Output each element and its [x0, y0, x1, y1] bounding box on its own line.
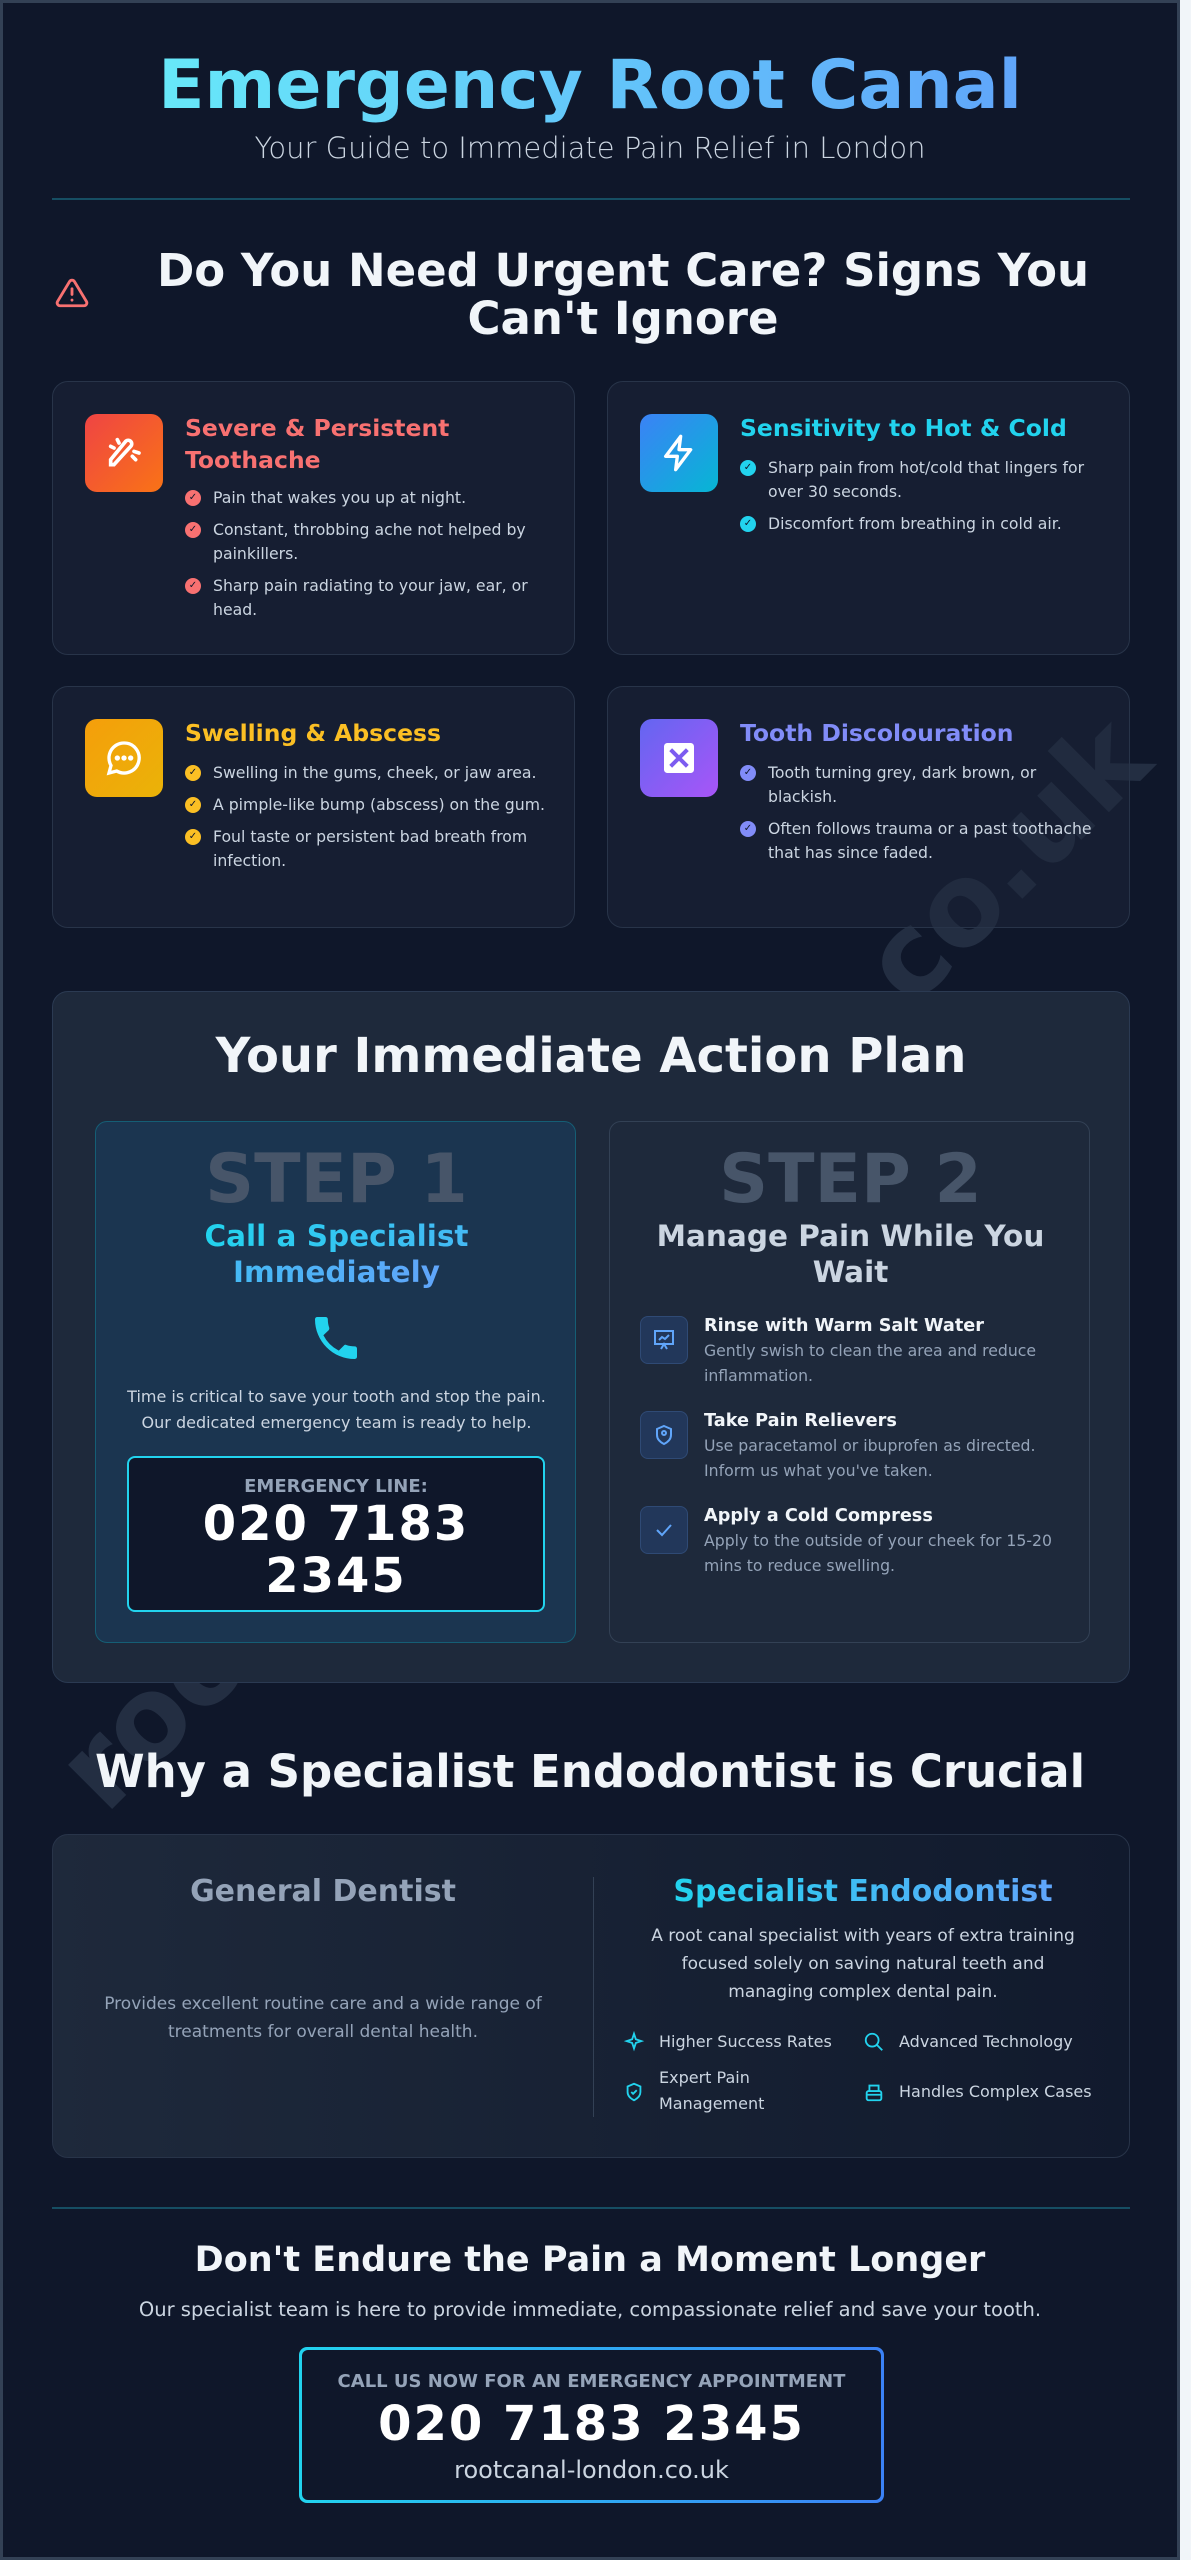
item: rinse [640, 1316, 1036, 1385]
item: rinse: Gently swish to clean the area and reduce inflammation. [704, 1341, 1036, 1385]
card title: Sensitivity to Hot & Cold [740, 414, 1067, 442]
card title: Swelling & Abscess [185, 719, 441, 747]
card title: Severe & Persistent Toothache [185, 414, 449, 474]
column: specialist: focused solely on saving natural teeth and [682, 1954, 1044, 1974]
card: swelling [52, 686, 575, 928]
panel: action plan [52, 991, 1130, 1683]
icon: phone [315, 1317, 357, 1359]
item: rinse: Rinse with Warm Salt Water [704, 1316, 984, 1336]
bullets: ✓ [189, 831, 197, 842]
title: Emergency Root Canal [158, 46, 1022, 125]
step 2 [609, 1121, 1090, 1643]
bullets: ✓ [189, 767, 197, 778]
column: general dentist [104, 1874, 542, 2042]
card: discolouration [607, 686, 1130, 928]
bullets: ✓ [189, 524, 197, 535]
column: general dentist: Provides excellent routine care and a wide range of [104, 1994, 542, 2014]
item: relievers: Take Pain Relievers [704, 1411, 897, 1431]
heading: action plan: Your Immediate Action Plan [216, 1028, 966, 1084]
step 1 title: Immediately [233, 1255, 440, 1289]
column: general dentist: General Dentist [190, 1874, 456, 1909]
bullets: Pain that wakes you up at night. [213, 488, 466, 507]
bullets [185, 488, 528, 619]
text [127, 1387, 546, 1432]
step 1 title [204, 1219, 468, 1289]
bullets: A pimple-like bump (abscess) on the gum. [213, 795, 545, 814]
bullets: ✓ [744, 462, 752, 473]
cta box [299, 2347, 884, 2503]
card: toothache [52, 381, 575, 655]
heading: why specialist: Why a Specialist Endodontist is Crucial [95, 1745, 1085, 1798]
features [624, 2031, 1092, 2113]
item: relievers [640, 1411, 1035, 1480]
bullets: Often follows trauma or a past toothache that has since faded. [768, 819, 1092, 862]
bullets: ✓ [189, 492, 197, 503]
step 1: STEP 1 [205, 1140, 468, 1219]
column: specialist [651, 1874, 1075, 2002]
cta box: rootcanal-london.co.uk [454, 2456, 729, 2484]
watermark: diagonal site name: rootcanal-london.co.uk [30, 690, 1175, 1835]
bullets: Sharp pain from hot/cold that lingers for over 30 seconds. [768, 458, 1084, 501]
cta box: 020 7183 2345 [378, 2396, 805, 2452]
step 2 title [657, 1219, 1044, 1289]
card: sensitivity [607, 381, 1130, 655]
bullets: Constant, throbbing ache not helped by painkillers. [213, 520, 526, 563]
bullets: ✓ [189, 580, 197, 591]
item: compress [640, 1506, 1052, 1575]
card title: Tooth Discolouration [740, 719, 1014, 747]
emergency line box [127, 1456, 545, 1612]
item: relievers: Use paracetamol or ibuprofen as directed. Inform us what you've taken. [704, 1436, 1035, 1480]
bullets: ✓ [744, 767, 752, 778]
bullets [185, 763, 545, 870]
column: specialist: A root canal specialist with years of extra training [651, 1926, 1075, 1946]
step 2: STEP 2 [719, 1140, 982, 1219]
emergency line box: 2345 [265, 1548, 407, 1604]
icon: warning [56, 278, 88, 308]
features: Expert Pain [659, 2068, 750, 2087]
bullets: Foul taste or persistent bad breath from infection. [213, 827, 527, 870]
icon: toothache [85, 414, 163, 492]
column: general dentist: treatments for overall dental health. [168, 2022, 478, 2042]
bullets [740, 458, 1084, 533]
heading: don't endure: Don't Endure the Pain a Moment Longer [195, 2240, 985, 2280]
features: Advanced Technology [899, 2032, 1073, 2051]
bullets: ✓ [189, 799, 197, 810]
emergency line box: EMERGENCY LINE: [244, 1476, 428, 1497]
step 1 [95, 1121, 576, 1643]
features: Handles Complex Cases [899, 2082, 1092, 2101]
item: compress: Apply to the outside of your cheek for 15-20 mins to reduce swelling. [704, 1531, 1052, 1575]
bullets: Swelling in the gums, cheek, or jaw area. [213, 763, 536, 782]
text: Our dedicated emergency team is ready to help. [142, 1413, 531, 1432]
text: cta subtitle: Our specialist team is here to provide immediate, compassionate relief and save your tooth. [139, 2298, 1041, 2321]
emergency line box: 020 7183 [203, 1496, 469, 1552]
step 2 title: Manage Pain While You [657, 1219, 1044, 1253]
bullets: ✓ [744, 518, 752, 529]
bullets [740, 763, 1092, 862]
subtitle: Your Guide to Immediate Pain Relief in London [254, 131, 926, 165]
cta box: CALL US NOW FOR AN EMERGENCY APPOINTMENT [338, 2371, 845, 2392]
features: Management [659, 2094, 764, 2113]
bullets: Sharp pain radiating to your jaw, ear, or head. [213, 576, 528, 619]
column: specialist: Specialist Endodontist [673, 1874, 1053, 1909]
features: Higher Success Rates [659, 2032, 832, 2051]
bullets: ✓ [744, 823, 752, 834]
icon: chat [85, 719, 163, 797]
panel: comparison [52, 1834, 1130, 2158]
icon: x box [640, 719, 718, 797]
heading: signs: Do You Need Urgent Care? Signs You Can't Ignore [157, 244, 1089, 345]
item: compress: Apply a Cold Compress [704, 1506, 933, 1526]
column: specialist: managing complex dental pain. [728, 1982, 998, 2002]
step 2 title: Wait [813, 1255, 888, 1289]
bullets: Tooth turning grey, dark brown, or blackish. [768, 763, 1036, 806]
bullets: Discomfort from breathing in cold air. [768, 514, 1062, 533]
step 1 title: Call a Specialist [204, 1219, 468, 1253]
icon: lightning [640, 414, 718, 492]
text: Time is critical to save your tooth and stop the pain. [127, 1387, 546, 1406]
